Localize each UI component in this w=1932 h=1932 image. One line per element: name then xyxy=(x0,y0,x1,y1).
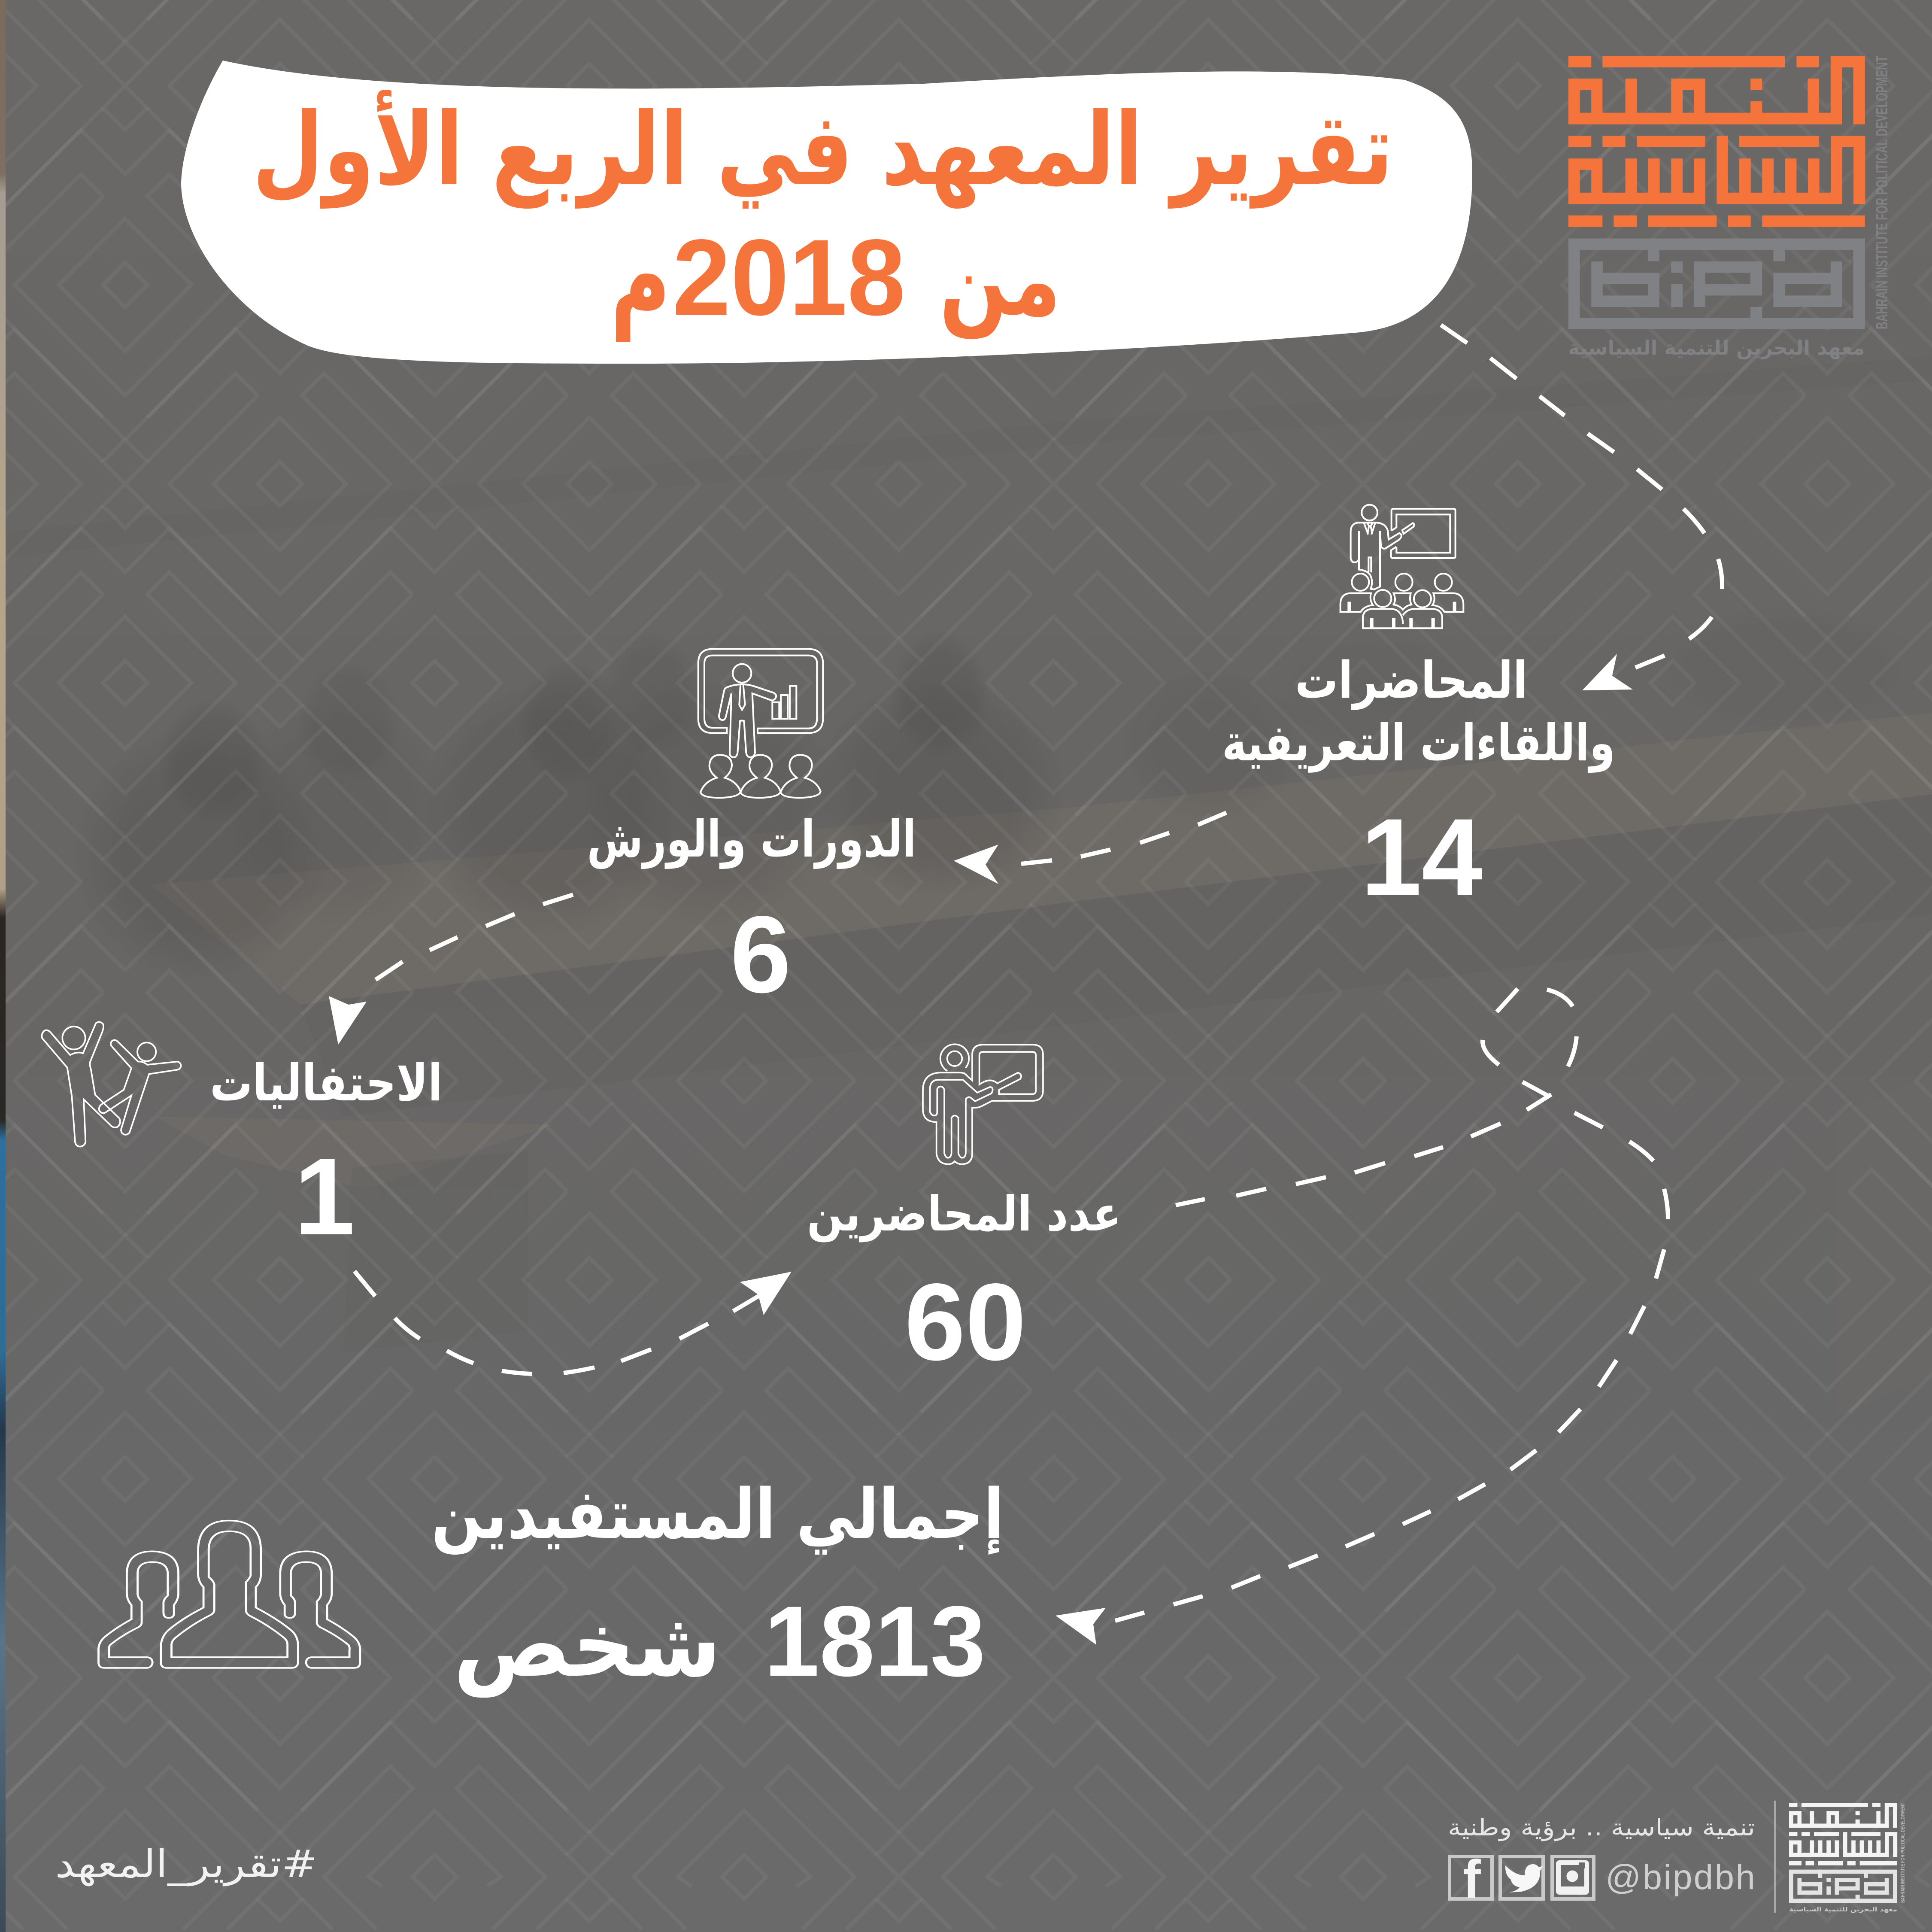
value: 1813 persons xyxy=(453,1586,986,1698)
title line 2: م xyxy=(610,212,670,343)
title line 2: من xyxy=(939,222,1061,339)
small logo Arabic name: معهد البحرين للتنمية السياسية xyxy=(1789,1906,1897,1913)
social handle: @bipdbh xyxy=(1605,1858,1755,1897)
footer separator and small logo xyxy=(1774,1801,1906,1913)
label: celebrations: الاحتفاليات xyxy=(210,1053,443,1112)
value: 14: 14 xyxy=(1361,796,1483,918)
icon: presenter with audience xyxy=(1341,505,1463,628)
title line 2 xyxy=(610,212,1061,343)
label: lectures and meetings xyxy=(1222,650,1615,773)
dashed arrow: courses to celebrations xyxy=(329,895,573,1045)
label: lectures and meetings: المحاضرات xyxy=(1295,650,1528,710)
footer tagline: تنمية سياسية .. برؤية وطنية xyxy=(1448,1814,1755,1841)
dashed arrow: celebrations to lecturers xyxy=(355,1271,792,1374)
dashed arrow: lecturers through loop to beneficiaries xyxy=(1055,989,1668,1645)
logo grey bipd mark xyxy=(1568,238,1865,329)
small logo mark xyxy=(1789,1803,1897,1903)
social icon: facebook: f xyxy=(1463,1850,1481,1909)
label: total beneficiaries: إجمالي المستفيدين xyxy=(431,1474,1004,1555)
icon: group of people xyxy=(98,1521,360,1668)
logo orange calligraphy xyxy=(1568,56,1865,227)
logo Arabic name: معهد البحرين للتنمية السياسية xyxy=(1568,336,1865,359)
social icon: twitter xyxy=(1500,1856,1543,1899)
label: lectures and meetings: واللقاءات التعريفية xyxy=(1222,713,1615,773)
value: 1813 persons: 1813 xyxy=(764,1586,986,1697)
label: courses and workshops: الدورات والورش xyxy=(587,809,916,869)
value: 1813 persons: شخص xyxy=(453,1592,721,1698)
icon: lecturer at board xyxy=(923,1044,1043,1164)
logo: institute kufic mark xyxy=(1568,56,1891,359)
title line 2: 2018 xyxy=(672,217,906,338)
value: 1: 1 xyxy=(294,1136,355,1258)
label: number of lecturers: عدد المحاضرين xyxy=(807,1186,1121,1242)
hashtag: #تقرير_المعهد xyxy=(55,1842,318,1886)
social icon: instagram xyxy=(1552,1856,1594,1899)
title banner xyxy=(181,61,1472,364)
dashed arrow: title to lectures xyxy=(1441,325,1722,690)
icon: dancers xyxy=(42,1022,181,1147)
value: 60: 60 xyxy=(904,1261,1026,1383)
title line 1: تقرير المعهد في الربع الأول xyxy=(252,90,1393,209)
small logo vertical text: BAHRAIN INSTITUTE FOR POLITICAL DEVELOPMENT xyxy=(1899,1803,1906,1903)
dashed arrow: lectures to courses xyxy=(954,813,1226,884)
icon: presenter with chart and board xyxy=(698,649,823,798)
social icon: facebook xyxy=(1450,1850,1492,1909)
value: 6: 6 xyxy=(730,893,791,1016)
